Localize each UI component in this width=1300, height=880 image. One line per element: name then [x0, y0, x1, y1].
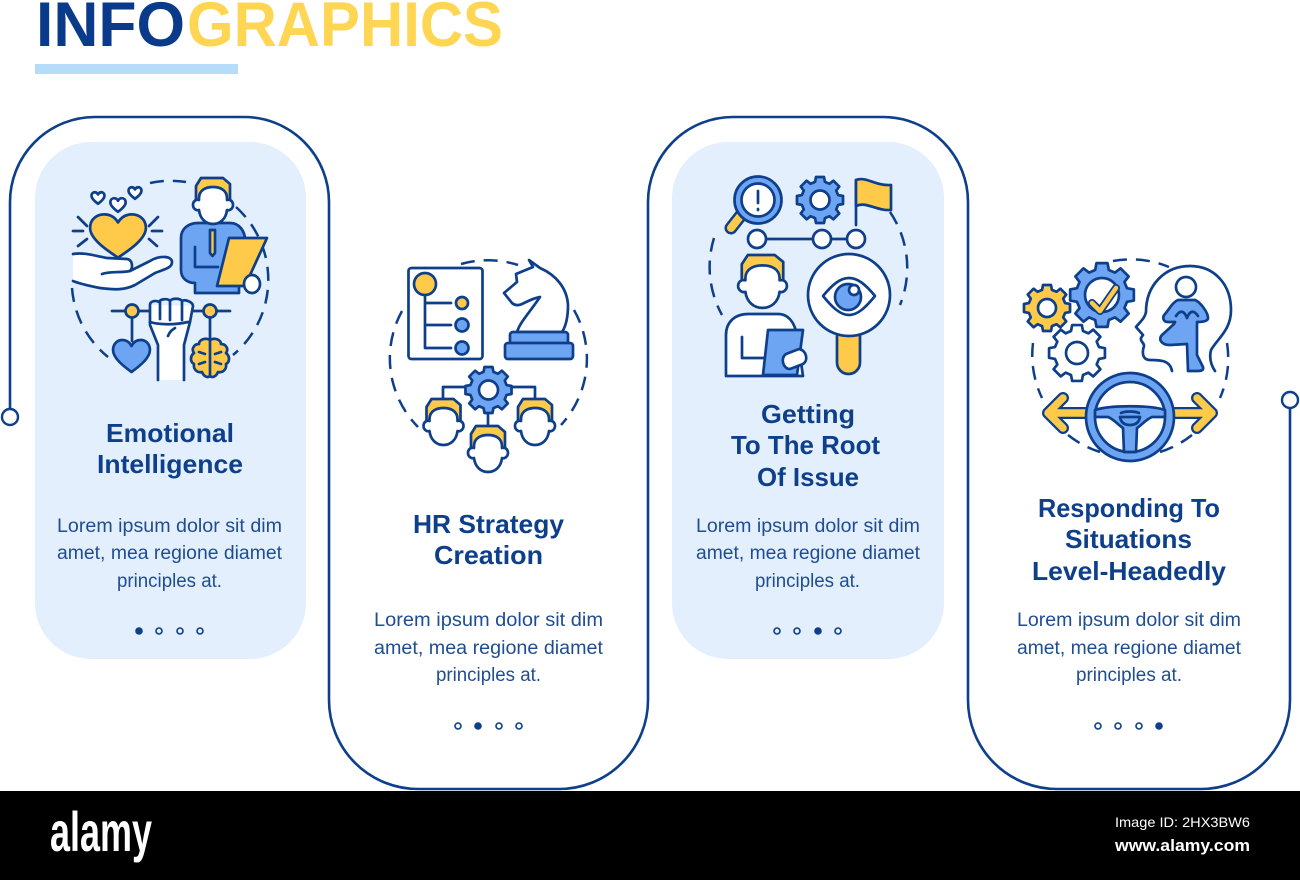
body text: principles at. [755, 571, 860, 592]
heading: Of Issue [757, 462, 859, 492]
footer bar [0, 791, 1300, 880]
panel: emotional intelligence [57, 178, 283, 634]
body text: amet, mea regione diamet [696, 543, 921, 564]
body text: Lorem ipsum dolor sit dim [696, 516, 920, 537]
heading: Level-Headedly [1032, 556, 1227, 586]
heading: Intelligence [97, 449, 243, 479]
heading [1032, 493, 1227, 586]
outline end node [1282, 392, 1298, 408]
heading: HR Strategy [413, 509, 565, 539]
icon: hr strategy [390, 260, 587, 472]
heading [97, 418, 243, 479]
body text [1017, 610, 1242, 686]
title underline [35, 64, 238, 74]
body text: principles at. [436, 665, 541, 686]
heading: To The Root [731, 430, 880, 460]
panel: getting to the root of issue [696, 176, 921, 634]
heading [731, 399, 880, 492]
heading: Responding To [1038, 493, 1220, 523]
website: www.alamy.com [1114, 836, 1250, 855]
panel: hr strategy creation [374, 260, 604, 729]
body text: amet, mea regione diamet [57, 543, 283, 564]
heading [413, 509, 565, 570]
connecting panel outline [10, 117, 1290, 789]
panel: root of issue background [672, 142, 944, 659]
pagination dots [455, 723, 522, 729]
body text: principles at. [1076, 665, 1182, 686]
icon: root of issue [710, 176, 907, 376]
body text [374, 610, 604, 686]
body text: Lorem ipsum dolor sit dim [374, 610, 603, 631]
image id: Image ID: 2HX3BW6 [1115, 814, 1250, 830]
pagination dots [136, 628, 203, 634]
title [36, 0, 503, 60]
icon: steering and balance [1024, 259, 1231, 461]
body text: Lorem ipsum dolor sit dim [1017, 610, 1241, 631]
pagination dots [1095, 723, 1162, 729]
heading: Emotional [106, 418, 234, 448]
footer logo: alamy [50, 800, 152, 863]
body text: amet, mea regione diamet [1017, 638, 1242, 659]
body text [696, 516, 921, 592]
body text: amet, mea regione diamet [374, 638, 604, 659]
icon: emotional intelligence [72, 178, 268, 380]
body text [57, 516, 283, 592]
panel: responding to situations level-headedly [1017, 259, 1242, 729]
panel: emotional intelligence background [35, 142, 306, 659]
body text: Lorem ipsum dolor sit dim [57, 516, 282, 537]
body text: principles at. [117, 571, 222, 592]
pagination dots [774, 628, 841, 634]
outline start node [2, 409, 18, 425]
heading: Situations [1065, 524, 1192, 554]
heading: Creation [434, 540, 543, 570]
heading: Getting [761, 399, 855, 429]
